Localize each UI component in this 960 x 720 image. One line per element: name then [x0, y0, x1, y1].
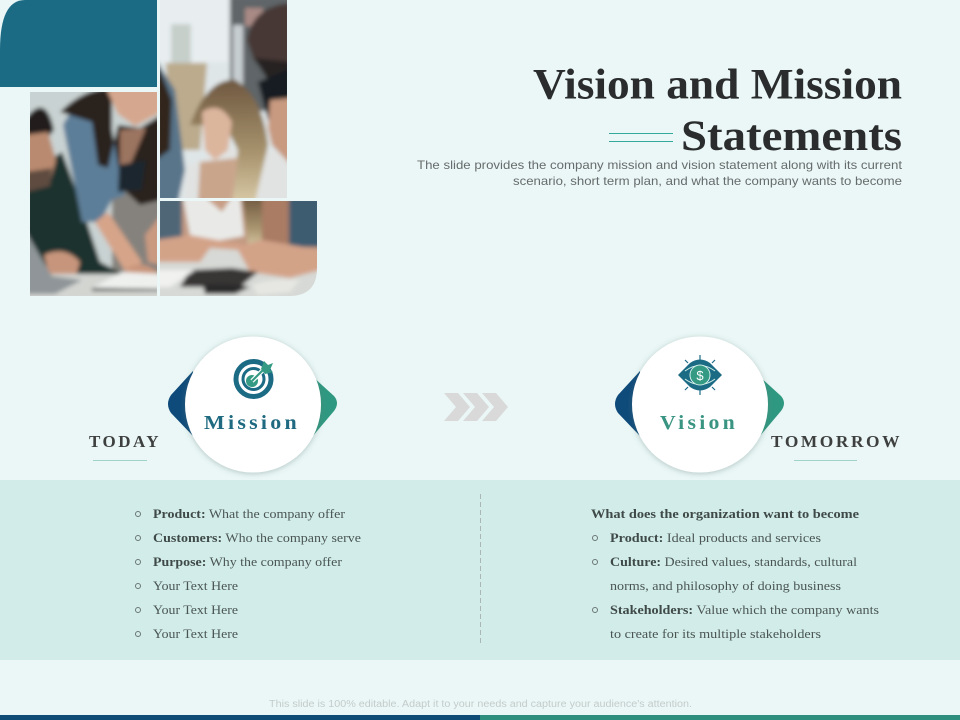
- title: [533, 62, 902, 160]
- subtitle text: [417, 158, 903, 188]
- icon: eye with dollar: $: [696, 368, 704, 383]
- mission list: Purpose: Why the company offer: [153, 555, 343, 569]
- icon: eye with dollar: [678, 355, 722, 395]
- footer note: This slide is 100% editable. Adapt it to your needs and capture your audience's attention.: [269, 699, 692, 710]
- footer bar: [0, 715, 960, 720]
- mission list: Your Text Here: [153, 627, 238, 641]
- mission badge: [168, 336, 337, 472]
- mission list: Customers: Who the company serve: [153, 531, 361, 545]
- photo panel: top right: [156, 0, 291, 202]
- mission label: Mission: [204, 412, 300, 434]
- subtitle text: scenario, short term plan, and what the company wants to become: [513, 174, 902, 188]
- mission list: [136, 507, 361, 641]
- vision label: Vision: [660, 412, 738, 434]
- vision badge: [615, 336, 784, 472]
- mission list: Product: What the company offer: [153, 507, 346, 521]
- panel: details band: [0, 480, 960, 660]
- subtitle text: The slide provides the company mission and vision statement along with its current: [417, 158, 903, 172]
- mission list: Your Text Here: [153, 579, 238, 593]
- title: Statements: [681, 113, 902, 160]
- process chevrons: [444, 393, 508, 421]
- tomorrow underline: [794, 460, 857, 461]
- photo panel: bottom right: [160, 201, 317, 296]
- vision list: Product: Ideal products and services: [610, 531, 821, 545]
- mission right diamond: [312, 376, 337, 437]
- vision list: Stakeholders: Value which the company wants: [610, 603, 879, 617]
- vision left diamond: [615, 371, 640, 436]
- today label: TODAY: [89, 432, 161, 451]
- vision list: to create for its multiple stakeholders: [610, 627, 821, 641]
- vision list: Culture: Desired values, standards, cultural: [610, 555, 858, 569]
- vision right diamond: [759, 376, 784, 437]
- title accent lines: [609, 133, 673, 142]
- mission left diamond: [168, 371, 193, 436]
- photo panel: left: [30, 92, 157, 296]
- title: Vision and Mission: [533, 62, 902, 108]
- vision circle: [632, 336, 768, 472]
- icon: target with arrow: [236, 361, 273, 396]
- teal corner block: [0, 0, 157, 87]
- mission list: Your Text Here: [153, 603, 238, 617]
- tomorrow label: TOMORROW: [771, 432, 902, 451]
- vision list: What does the organization want to become: [591, 507, 860, 521]
- photo: team collaborating at a table: [26, 0, 321, 300]
- vision list: norms, and philosophy of doing business: [610, 579, 841, 593]
- vision list: [591, 507, 879, 641]
- today underline: [93, 460, 147, 461]
- mission circle: [185, 336, 321, 472]
